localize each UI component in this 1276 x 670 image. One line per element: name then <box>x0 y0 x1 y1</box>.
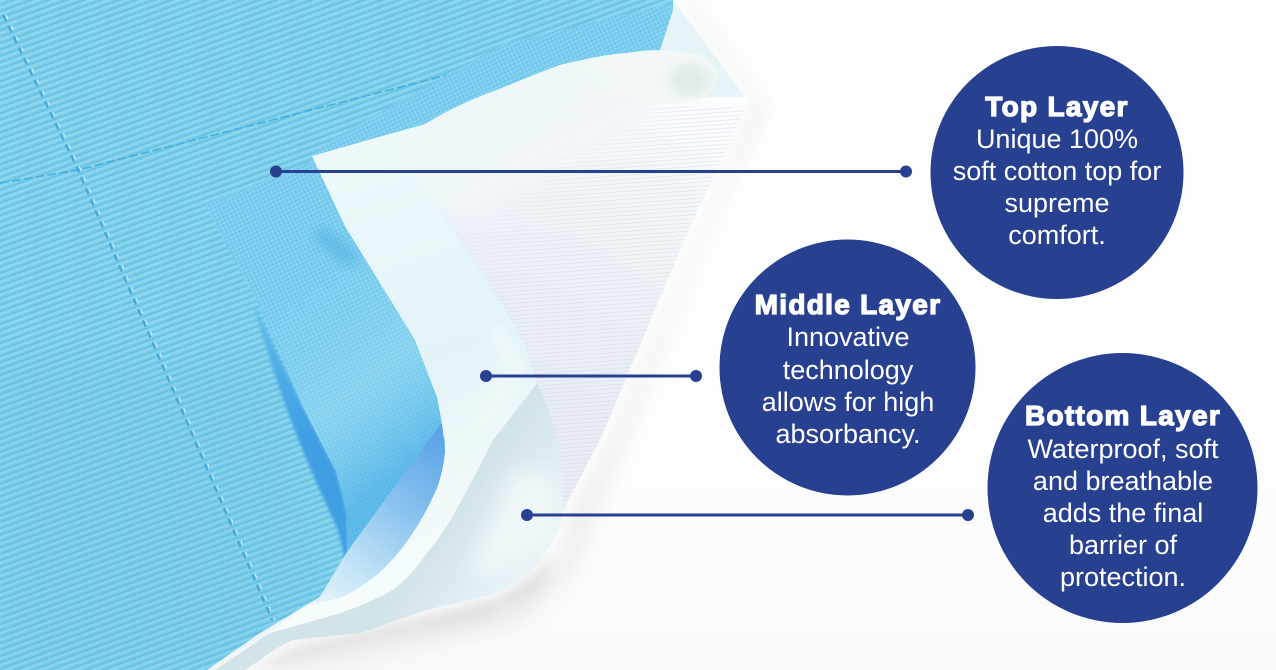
callout: top layer <box>930 46 1184 299</box>
panel knit texture <box>460 105 746 510</box>
upper fleece tone <box>400 50 720 209</box>
fabric illustration <box>0 0 768 670</box>
flap shading <box>205 160 442 552</box>
text: middle layer description: allows for high <box>762 387 934 417</box>
backing corner <box>640 0 747 110</box>
top blue cotton layer <box>0 0 673 670</box>
text: top layer description: comfort. <box>1008 220 1106 250</box>
heading: middle layer: Middle Layer <box>755 289 941 320</box>
text: middle layer description: technology <box>783 355 914 385</box>
text: bottom layer description: protection. <box>1060 562 1186 592</box>
folded blue flap <box>205 160 442 552</box>
pocket shadow <box>254 305 349 575</box>
callout: middle layer <box>720 240 976 496</box>
connector: middle layer <box>480 370 702 382</box>
fabric shadow <box>250 0 768 670</box>
middle fleece layer <box>270 50 720 633</box>
fleece details <box>440 65 710 430</box>
text: top layer description: soft cotton top for <box>953 156 1161 186</box>
connector: bottom layer <box>521 509 974 521</box>
woven white panel <box>440 97 748 510</box>
heading: bottom layer: Bottom Layer <box>1025 400 1221 431</box>
heading: top layer: Top Layer <box>985 91 1129 122</box>
stitching <box>0 15 455 620</box>
connector: top layer <box>270 166 912 178</box>
text: middle layer description: absorbancy. <box>775 419 921 449</box>
text: middle layer description: Innovative <box>786 322 910 352</box>
callout: bottom layer <box>988 353 1258 623</box>
bottom layer highlight <box>470 470 555 580</box>
text: bottom layer description: and breathable <box>1033 466 1213 496</box>
text: top layer description: Unique 100% <box>976 124 1138 154</box>
text: top layer description: supreme <box>1004 188 1110 218</box>
bottom layer <box>215 383 563 670</box>
body shading <box>0 360 340 670</box>
text: bottom layer description: Waterproof, soft <box>1027 434 1219 464</box>
text: bottom layer description: adds the final <box>1043 498 1203 528</box>
hem band <box>312 3 673 156</box>
text: bottom layer description: barrier of <box>1069 530 1178 560</box>
blue underside of fleece <box>303 422 445 607</box>
